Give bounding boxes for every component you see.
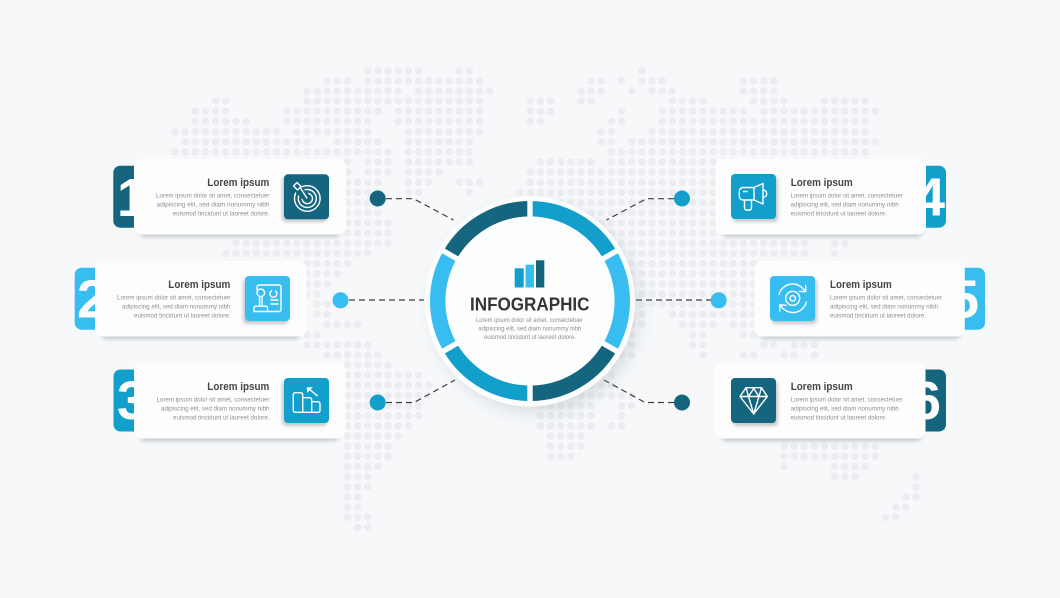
card 3 text: Lorem ipsum dolor sit amet, consectetuer — [156, 398, 270, 404]
card 5 text — [830, 296, 942, 320]
card 3 text: euismod tincidunt ut laoreet dolore. — [173, 416, 270, 422]
hub text: adipiscing elit, sed diam nonummy nibh — [478, 326, 581, 332]
panel: card 4 — [716, 159, 946, 237]
icon: bar chart — [515, 260, 544, 288]
icon: diamond — [731, 378, 778, 426]
card 4 title: Lorem ipsum — [791, 177, 853, 189]
icon: sync circle — [770, 276, 817, 324]
card 3 text: adipiscing elit, sed diam nonummy nibh — [161, 407, 270, 413]
panel: card 1 — [113, 159, 346, 237]
card 2 text: adipiscing elit, sed diam nonummy nibh — [122, 305, 230, 311]
panel: card 6 — [715, 363, 946, 441]
card 1 text: euismod tincidunt ut laoreet dolore. — [173, 212, 270, 218]
number tab 5: 5 — [949, 270, 979, 330]
panel: card 2 — [75, 261, 306, 339]
hub text — [476, 318, 583, 341]
number tab 2: 2 — [77, 270, 107, 330]
card 6 text: euismod tincidunt ut laoreet dolore. — [791, 416, 887, 422]
card 1 text: adipiscing elit, sed diam nonummy nibh — [156, 203, 270, 209]
connector: dot 5 to hub — [636, 292, 727, 308]
dotted world map — [175, 71, 916, 527]
icon: growth chart — [282, 378, 329, 426]
icon: megaphone — [731, 174, 778, 222]
panel: card 3 — [114, 363, 346, 441]
connector: dot 3 to hub — [370, 380, 455, 410]
number tab 1: 1 — [117, 168, 147, 228]
card 2 title: Lorem ipsum — [168, 279, 230, 291]
card 4 text: Lorem ipsum dolor sit amet, consectetuer — [791, 194, 903, 200]
card 4 text: euismod tincidunt ut laoreet dolore. — [791, 212, 887, 218]
card 5 text: Lorem ipsum dolor sit amet, consectetuer — [830, 296, 942, 302]
card 1 text: Lorem ipsum dolor sit amet, consectetuer — [156, 194, 270, 200]
connector: dot 1 to hub — [370, 190, 454, 220]
heading: INFOGRAPHIC — [470, 294, 590, 315]
connector: dot 6 to hub — [604, 380, 690, 410]
card 4 text: adipiscing elit, sed diam nonummy nibh — [791, 203, 899, 209]
card 3 text — [156, 398, 270, 422]
card 2 text: Lorem ipsum dolor sit amet, consectetuer — [117, 296, 230, 302]
card 2 text: euismod tincidunt ut laoreet dolore. — [134, 314, 231, 320]
card 5 text: euismod tincidunt ut laoreet dolore. — [830, 314, 926, 320]
number tab 4: 4 — [915, 168, 945, 228]
hub text: euismod tincidunt ut laoreet dolore. — [484, 335, 576, 341]
card 4 text — [791, 194, 903, 218]
ring segments — [438, 198, 622, 404]
panel: card 5 — [754, 261, 985, 339]
number tab 3: 3 — [117, 371, 147, 431]
central hub — [425, 196, 640, 413]
card 1 title: Lorem ipsum — [207, 177, 269, 189]
card 6 text: Lorem ipsum dolor sit amet, consectetuer — [791, 398, 903, 404]
card 5 text: adipiscing elit, sed diam nonummy nibh — [830, 305, 938, 311]
icon: stamp document — [243, 276, 290, 324]
card 6 text — [791, 398, 903, 422]
icon: target — [282, 174, 329, 222]
card 3 title: Lorem ipsum — [207, 381, 269, 393]
card 1 text — [156, 194, 270, 218]
number tab 6: 6 — [911, 371, 941, 431]
connector: dot 4 to hub — [606, 190, 690, 220]
card 2 text — [117, 296, 231, 320]
card 6 title: Lorem ipsum — [791, 381, 853, 393]
card 5 title: Lorem ipsum — [830, 279, 892, 291]
connector: dot 2 to hub — [332, 292, 424, 308]
hub text: Lorem ipsum dolor sit amet, consectetuer — [476, 318, 583, 324]
card 6 text: adipiscing elit, sed diam nonummy nibh — [791, 407, 899, 413]
